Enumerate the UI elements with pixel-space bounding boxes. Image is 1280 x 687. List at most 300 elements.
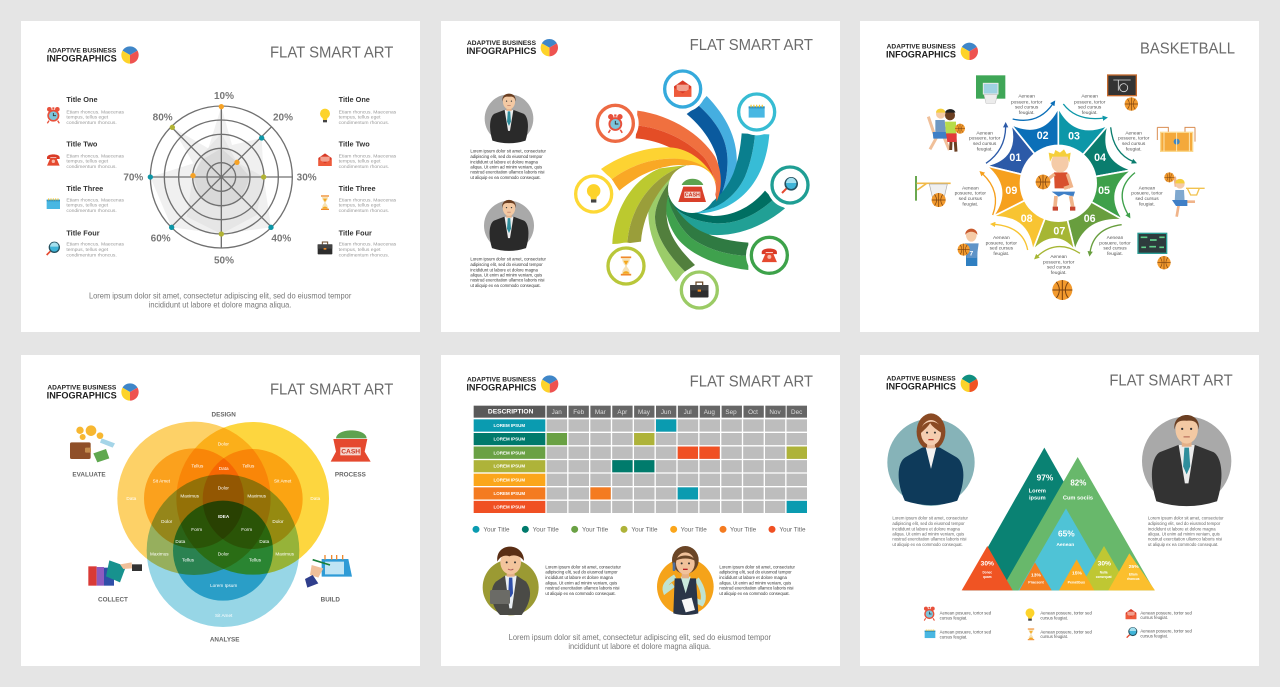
arrow captions: feugiat. xyxy=(993,251,1009,257)
logo: INFOGRAPHICS xyxy=(466,46,536,57)
center player xyxy=(1036,149,1075,211)
colored schedule cells xyxy=(547,419,807,513)
text block 1: ut aliquip ex ea commodo consequat. xyxy=(470,175,541,180)
table header: Jul xyxy=(684,409,692,416)
panel: schedule table xyxy=(441,355,840,666)
triangle labels: Praesent xyxy=(1028,580,1045,584)
legend: cursus feugiat. xyxy=(1140,615,1168,620)
left legend xyxy=(47,95,124,258)
legend: Your Title xyxy=(631,527,658,534)
venn labels: Data xyxy=(175,539,186,544)
text block 2: ut aliquip ex ea commodo consequat. xyxy=(470,283,541,288)
text block 2: nostrud exercitation ullamco laboris nisi xyxy=(470,278,545,283)
table header: Oct xyxy=(748,409,758,416)
triangle labels: Donec xyxy=(983,571,992,575)
arrow captions: feugiat. xyxy=(1126,146,1142,152)
icon ring: briefcase xyxy=(676,267,723,313)
triangle labels: consequat xyxy=(1096,575,1112,579)
triangle labels: 30% xyxy=(1098,561,1111,568)
person: man xyxy=(484,200,534,251)
logo: INFOGRAPHICS xyxy=(886,50,956,61)
segment numbers: 06 xyxy=(1084,213,1096,225)
title: FLAT SMART ART xyxy=(270,44,394,61)
heading labels: COLLECT xyxy=(98,596,128,603)
venn labels: Data xyxy=(219,466,229,471)
legend: Your Title xyxy=(730,527,757,534)
table row labels: LOREM IPSUM xyxy=(494,423,525,428)
arrow captions: posuere, tortor xyxy=(1118,136,1150,142)
title: FLAT SMART ART xyxy=(270,381,394,398)
table header: Feb xyxy=(573,409,585,416)
table header: Dec xyxy=(791,409,802,416)
nine-segment star xyxy=(986,107,1132,251)
venn labels: Dolor xyxy=(218,485,229,490)
icon: woman player: 7 xyxy=(969,250,973,257)
arrow captions: posuere, tortor xyxy=(969,136,1001,142)
footer text: incididunt ut labore et dolore magna aliqua. xyxy=(568,641,711,651)
logo xyxy=(466,375,558,393)
venn labels: Tellus xyxy=(191,464,204,469)
left legend: condimentum rhoncus. xyxy=(66,120,117,126)
arrow captions: feugiat. xyxy=(1051,270,1067,276)
left legend: condimentum rhoncus. xyxy=(66,252,117,258)
table row labels: LOREM IPSUM xyxy=(494,477,525,482)
legend: cursus feugiat. xyxy=(1140,634,1168,639)
right legend: Title Three xyxy=(339,184,376,193)
person: woman xyxy=(887,413,975,506)
left legend: condimentum rhoncus. xyxy=(66,208,117,214)
panel: spiral diagram xyxy=(441,21,840,332)
table header: Nov xyxy=(769,409,781,416)
legend: Aenean posuere, tortor sed xyxy=(940,630,992,635)
heading labels: EVALUATE xyxy=(72,472,106,479)
arrow captions: posuere, tortor xyxy=(1131,191,1163,197)
arrow captions: sed cursus xyxy=(1047,265,1071,271)
arrow captions: Aenean xyxy=(1125,130,1142,136)
table row labels: LOREM IPSUM xyxy=(494,491,525,496)
arrow captions: sed cursus xyxy=(1135,196,1159,202)
logo xyxy=(886,43,978,61)
text block left: ut aliquip ex ea commodo consequat. xyxy=(892,542,963,547)
text block right: nostrud exercitation ullamco laboris nisi xyxy=(719,586,794,591)
heading labels: PROCESS xyxy=(335,472,366,479)
venn labels: Tellus xyxy=(182,557,195,562)
icon: wallet and coins xyxy=(70,425,115,462)
table header: DESCRIPTION xyxy=(488,409,534,416)
center: cash bag xyxy=(668,165,716,213)
triangle labels: Etiam xyxy=(1129,572,1138,576)
right legend: Etiam rhoncus. Maecenas xyxy=(339,197,397,203)
venn labels: Tellus xyxy=(242,464,255,469)
icon: backboard xyxy=(976,75,1005,103)
panel: radar chart xyxy=(21,21,420,332)
table header: Jun xyxy=(661,409,672,416)
right legend: tempus, tellus eget xyxy=(339,159,381,165)
arrow captions: Aenean xyxy=(962,185,979,191)
title: BASKETBALL xyxy=(1140,40,1235,57)
table header: May xyxy=(638,409,651,416)
legend: Aenean posuere, tortor sed xyxy=(1040,629,1092,634)
icon: scoreboard xyxy=(1138,233,1171,269)
text block left: adipiscing elit, sed do eiusmod tempor xyxy=(892,521,965,526)
text block left: nostrud exercitation ullamco laboris nisi xyxy=(892,537,967,542)
arrow captions: sed cursus xyxy=(1122,141,1146,147)
footer text: Lorem ipsum dolor sit amet, consectetur adipiscing elit, sed do eiusmod tempor xyxy=(89,291,351,301)
panel: triangle chart xyxy=(860,355,1259,666)
venn labels: Dolor xyxy=(218,442,229,447)
triangle labels: Aenean xyxy=(1056,542,1074,548)
segment numbers: 05 xyxy=(1098,185,1110,197)
venn labels: Data xyxy=(126,496,137,501)
arrow captions: posuere, tortor xyxy=(1011,99,1043,105)
icon ring: bulb xyxy=(570,171,617,217)
title: FLAT SMART ART xyxy=(690,37,813,54)
legend xyxy=(924,607,1192,640)
radar chart: 10% xyxy=(214,91,234,102)
arrow captions: feugiat. xyxy=(1107,251,1123,257)
table header: Sep xyxy=(725,409,737,416)
spiral arms xyxy=(601,96,785,282)
table header: Aug xyxy=(704,409,715,416)
left legend: tempus, tellus eget xyxy=(66,203,109,209)
arrow captions: feugiat. xyxy=(962,201,978,207)
table header: Mar xyxy=(595,409,606,416)
text block right: Lorem ipsum dolor sit amet, consectetur xyxy=(719,564,796,569)
text block left: incididunt ut labore et dolore magna xyxy=(892,526,961,531)
left legend: Title One xyxy=(66,95,98,104)
logo xyxy=(886,375,978,393)
venn labels: Sit Amet xyxy=(274,479,292,484)
radar chart: 60% xyxy=(151,233,171,244)
left legend: tempus, tellus eget xyxy=(66,115,109,121)
legend: Aenean posuere, tortor sed xyxy=(1040,610,1092,615)
icon: basketball xyxy=(1052,280,1072,300)
legend: cursus feugiat. xyxy=(940,616,967,621)
segment numbers: 08 xyxy=(1021,213,1033,225)
triangle labels: Cum sociis xyxy=(1063,495,1093,501)
icon: two players xyxy=(928,109,965,152)
venn labels: Data xyxy=(310,496,321,501)
panel: basketball xyxy=(860,21,1259,332)
triangle labels: 30% xyxy=(981,561,994,568)
text block 2: aliqua. Ut enim ad minim veniam, quis xyxy=(470,272,542,277)
radar chart: 20% xyxy=(273,113,293,124)
radar chart xyxy=(123,91,317,267)
venn labels xyxy=(126,442,321,618)
legend: cursus feugiat. xyxy=(1040,634,1068,639)
right legend: Title Four xyxy=(339,229,372,238)
triangle labels: Penatibus xyxy=(1068,580,1085,584)
arrows xyxy=(982,104,1135,257)
arrow captions: sed cursus xyxy=(1078,105,1102,111)
icon: woman player xyxy=(958,228,979,266)
heading labels: BUILD xyxy=(321,596,340,603)
arrow captions: Aenean xyxy=(1139,185,1156,191)
arrow captions: posuere, tortor xyxy=(1043,259,1075,265)
triangle labels xyxy=(981,472,1140,584)
text block right xyxy=(1148,516,1224,547)
segment numbers: 07 xyxy=(1053,225,1065,237)
text block left: aliqua. Ut enim ad minim veniam, quis xyxy=(892,531,964,536)
arrow captions: sed cursus xyxy=(959,196,983,202)
text block right: aliqua. Ut enim ad minim veniam, quis xyxy=(719,580,791,585)
legend: Your Title xyxy=(779,527,806,534)
text block 1: aliqua. Ut enim ad minim veniam, quis xyxy=(470,164,542,169)
icon: cash bag: CASH xyxy=(341,449,360,456)
right legend: tempus, tellus eget xyxy=(339,203,381,209)
triangle labels: 82% xyxy=(1070,479,1086,488)
text block right: adipiscing elit, sed do eiusmod tempor xyxy=(719,570,792,575)
legend: Your Title xyxy=(533,527,559,534)
footer text: incididunt ut labore et dolore magna aliqua. xyxy=(149,300,291,310)
text block right: Lorem ipsum dolor sit amet, consectetur xyxy=(1148,516,1224,521)
title: FLAT SMART ART xyxy=(1109,373,1233,390)
venn labels: Sit Amet xyxy=(215,613,233,618)
triangles xyxy=(962,448,1155,590)
legend: Your Title xyxy=(681,527,707,534)
logo: INFOGRAPHICS xyxy=(886,382,956,393)
venn labels: Form xyxy=(191,527,202,532)
venn labels: Tellus xyxy=(249,557,262,562)
logo: ADAPTIVE BUSINESS xyxy=(467,376,537,383)
left legend: Etiam rhoncus. Maecenas xyxy=(66,153,124,159)
person: man xyxy=(1142,415,1231,506)
segment numbers: 02 xyxy=(1037,130,1049,142)
text block 2: Lorem ipsum dolor sit amet, consectetur xyxy=(470,257,547,262)
icon ring: hourglass xyxy=(603,243,649,289)
arrow captions: Aenean xyxy=(993,235,1010,241)
triangle labels: Nulla xyxy=(1100,571,1108,575)
text block right: adipiscing elit, sed do eiusmod tempor xyxy=(1148,521,1221,526)
arrow captions: feugiat. xyxy=(1139,201,1155,207)
triangle labels: 13% xyxy=(1031,573,1042,579)
logo: INFOGRAPHICS xyxy=(466,382,536,393)
right legend: Title One xyxy=(339,95,370,104)
logo: ADAPTIVE BUSINESS xyxy=(887,376,956,383)
icon: calendar and hand xyxy=(305,555,352,588)
left legend: tempus, tellus eget xyxy=(66,159,109,165)
legend: Your Title xyxy=(483,527,510,534)
footer text xyxy=(509,632,771,651)
panel: venn diagram xyxy=(21,355,420,666)
venn labels: Dolor xyxy=(161,519,173,524)
icon: cash bag xyxy=(331,430,371,462)
legend: Your Title xyxy=(582,527,609,534)
arrow captions: feugiat. xyxy=(1082,110,1098,116)
arrow captions: sed cursus xyxy=(973,141,997,147)
logo: ADAPTIVE BUSINESS xyxy=(467,40,537,47)
triangle labels: 25% xyxy=(1129,564,1139,570)
venn labels: Maximus xyxy=(150,552,169,557)
heading labels xyxy=(72,411,366,644)
legend xyxy=(472,526,806,534)
table header: Apr xyxy=(617,409,627,416)
triangle labels: 97% xyxy=(1037,472,1054,482)
triangle labels: ipsum xyxy=(1029,496,1046,502)
legend: cursus feugiat. xyxy=(1040,615,1068,620)
logo xyxy=(47,383,139,402)
logo: ADAPTIVE BUSINESS xyxy=(887,44,956,51)
arrow captions: sed cursus xyxy=(990,246,1014,252)
person: businessman xyxy=(483,547,539,615)
legend: Aenean posuere, tortor sed xyxy=(940,611,992,616)
venn labels: Sit Amet xyxy=(153,479,171,484)
venn circles xyxy=(117,422,329,627)
logo: ADAPTIVE BUSINESS xyxy=(47,48,117,55)
segment numbers xyxy=(1005,130,1110,237)
venn labels: Form xyxy=(241,527,252,532)
right legend: Title Two xyxy=(339,139,370,148)
text block left: ut aliquip ex ea commodo consequat. xyxy=(545,591,616,596)
arrow captions: sed cursus xyxy=(1015,105,1039,111)
radar chart: 50% xyxy=(214,256,234,267)
arrow captions: Aenean xyxy=(1050,254,1067,260)
table row labels: LOREM IPSUM xyxy=(494,437,525,442)
person: man with glasses xyxy=(485,94,533,143)
segment numbers: 09 xyxy=(1005,185,1017,197)
icon: dunking player xyxy=(1164,172,1205,217)
right legend: condimentum rhoncus. xyxy=(339,120,389,126)
right legend: condimentum rhoncus. xyxy=(339,252,389,258)
table row labels: LOREM IPSUM xyxy=(494,464,525,469)
triangle labels: Lorem xyxy=(1029,488,1046,494)
arrow captions: posuere, tortor xyxy=(1099,240,1131,246)
logo: INFOGRAPHICS xyxy=(47,54,117,65)
text block left: aliqua. Ut enim ad minim veniam, quis xyxy=(545,580,617,585)
text block 2: adipiscing elit, sed do eiusmod tempor xyxy=(470,262,543,267)
icon: folders xyxy=(88,560,142,586)
icon: hoop xyxy=(916,176,951,207)
table row labels xyxy=(474,419,545,513)
table row labels: LOREM IPSUM xyxy=(494,450,525,455)
venn labels: Maximus xyxy=(247,493,267,498)
triangle labels: quam xyxy=(983,575,992,579)
text block 1: Lorem ipsum dolor sit amet, consectetur xyxy=(470,149,547,154)
arrow captions xyxy=(955,94,1163,276)
text block left: Lorem ipsum dolor sit amet, consectetur xyxy=(545,564,622,569)
legend: Aenean posuere, tortor sed xyxy=(1140,629,1192,634)
icon ring: envelope xyxy=(659,66,706,112)
left legend: Etiam rhoncus. Maecenas xyxy=(66,109,124,115)
table row labels: LOREM IPSUM xyxy=(494,505,525,510)
arrow captions: Aenean xyxy=(976,130,993,136)
venn labels: Lorem Ipsum xyxy=(210,583,237,588)
text block 1: nostrud exercitation ullamco laboris nisi xyxy=(470,170,545,175)
triangle labels: 15% xyxy=(1072,570,1083,576)
footer text xyxy=(89,291,351,310)
heading labels: ANALYSE xyxy=(210,637,240,644)
arrow captions: Aenean xyxy=(1018,94,1035,100)
arrow captions: Aenean xyxy=(1107,235,1124,241)
icon ring: alarm clock xyxy=(592,100,639,147)
icon ring: calendar xyxy=(733,89,780,135)
left legend: tempus, tellus eget xyxy=(66,247,109,253)
icon: tactics board xyxy=(1108,75,1138,111)
icon ring: phone xyxy=(746,232,793,279)
venn labels: Maximus xyxy=(180,493,200,498)
radar chart: 40% xyxy=(271,233,291,244)
table header xyxy=(474,406,807,418)
logo: INFOGRAPHICS xyxy=(47,391,117,402)
text block left xyxy=(892,516,969,547)
text block right: ut aliquip ex ea commodo consequat. xyxy=(719,591,790,596)
left legend: Title Four xyxy=(66,229,100,238)
text block left: adipiscing elit, sed do eiusmod tempor xyxy=(545,570,618,575)
left legend: Title Two xyxy=(66,139,98,148)
triangle labels: 65% xyxy=(1058,528,1075,538)
left legend: Title Three xyxy=(66,184,103,193)
right legend xyxy=(318,95,397,258)
text block left xyxy=(545,564,622,596)
text block right xyxy=(719,564,796,596)
segment numbers: 03 xyxy=(1068,130,1080,142)
radar chart: 30% xyxy=(297,172,317,183)
segment numbers: 01 xyxy=(1009,152,1021,164)
left legend: Etiam rhoncus. Maecenas xyxy=(66,242,124,248)
arrow captions: posuere, tortor xyxy=(955,191,986,197)
arrow captions: posuere, tortor xyxy=(1074,99,1106,105)
right legend: Etiam rhoncus. Maecenas xyxy=(339,109,397,115)
legend: Aenean posuere, tortor sed xyxy=(1140,610,1192,615)
center: cash bag: CASH xyxy=(685,193,700,199)
radar chart: 80% xyxy=(153,113,173,124)
arrow captions: feugiat. xyxy=(1019,110,1035,116)
venn labels: Maximus xyxy=(275,552,295,557)
text block right: aliqua. Ut enim ad minim veniam, quis xyxy=(1148,531,1220,536)
segment numbers: 04 xyxy=(1094,152,1106,164)
text block left: Lorem ipsum dolor sit amet, consectetur xyxy=(892,516,969,521)
venn labels: Data xyxy=(259,539,270,544)
right legend: tempus, tellus eget xyxy=(339,247,381,253)
heading labels: DESIGN xyxy=(212,411,236,418)
table header: Jan xyxy=(552,409,562,416)
right legend: Etiam rhoncus. Maecenas xyxy=(339,242,397,248)
icon: court xyxy=(1157,127,1195,151)
footer text: Lorem ipsum dolor sit amet, consectetur adipiscing elit, sed do eiusmod tempor xyxy=(509,632,771,642)
text block 1 xyxy=(470,149,547,180)
logo: ADAPTIVE BUSINESS xyxy=(47,385,117,392)
text block right: incididunt ut labore et dolore magna xyxy=(719,575,788,580)
right legend: Etiam rhoncus. Maecenas xyxy=(339,153,397,159)
text block 2: incididunt ut labore et dolore magna xyxy=(470,267,539,272)
table grid xyxy=(547,419,807,513)
logo xyxy=(47,46,139,65)
text block left: incididunt ut labore et dolore magna xyxy=(545,575,614,580)
venn labels: Dolor xyxy=(218,551,229,556)
text block right: incididunt ut labore et dolore magna xyxy=(1148,526,1216,531)
text block 1: adipiscing elit, sed do eiusmod tempor xyxy=(470,154,543,159)
text block 1: incididunt ut labore et dolore magna xyxy=(470,159,539,164)
venn labels: Dolor xyxy=(272,519,284,524)
right legend: condimentum rhoncus. xyxy=(339,164,389,170)
logo xyxy=(466,39,558,57)
text block right: ut aliquip ex ea commodo consequat. xyxy=(1148,542,1218,547)
text block right: nostrud exercitation ullamco laboris nisi xyxy=(1148,537,1222,542)
triangle labels: rhoncus xyxy=(1127,577,1140,581)
icon ring: magnifier xyxy=(767,162,813,208)
arrow captions: sed cursus xyxy=(1103,246,1127,252)
legend: cursus feugiat. xyxy=(940,635,967,640)
text block 2 xyxy=(470,257,547,288)
arrow captions: feugiat. xyxy=(977,146,993,152)
radar chart: 70% xyxy=(123,172,143,183)
left legend: condimentum rhoncus. xyxy=(66,164,117,170)
text block left: nostrud exercitation ullamco laboris nisi xyxy=(545,586,620,591)
venn labels: IDEA xyxy=(218,514,230,519)
title: FLAT SMART ART xyxy=(690,373,813,390)
left legend: Etiam rhoncus. Maecenas xyxy=(66,197,124,203)
right legend: condimentum rhoncus. xyxy=(339,208,389,214)
